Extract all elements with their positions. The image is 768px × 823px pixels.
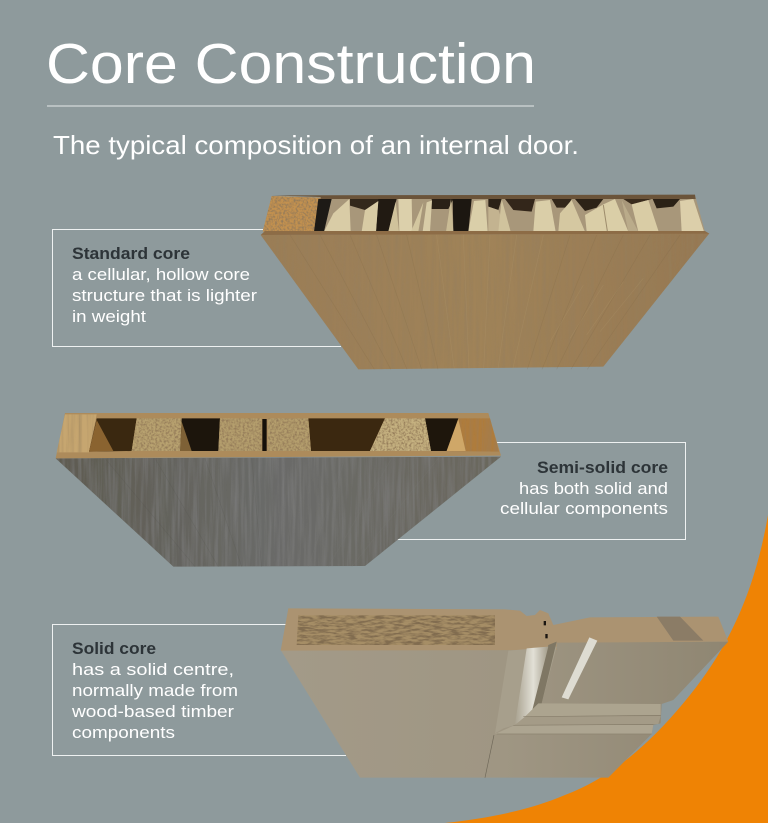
callout frame: standard core (52, 230, 341, 346)
title: Core Construction (46, 32, 536, 96)
right timber stile (447, 418, 499, 452)
heading: semi-solid core: Semi-solid core (537, 459, 668, 477)
top veneer strip (272, 195, 696, 199)
door face: grey veneer (56, 457, 501, 567)
door: semi-solid core (56, 413, 501, 567)
large moulding (515, 647, 548, 724)
chipboard blocks (132, 418, 466, 451)
subtitle: The typical composition of an internal door. (53, 130, 579, 160)
callout frame: solid core (52, 624, 346, 756)
body line: structure that is lighter (72, 287, 258, 305)
body line: a cellular, hollow core (72, 266, 250, 284)
honeycomb cavity (313, 198, 705, 232)
frame shading (657, 617, 703, 641)
solid edge block (263, 196, 321, 232)
section slot lower (545, 634, 548, 638)
body line: has a solid centre, (72, 661, 234, 679)
door: standard core (261, 195, 709, 369)
text: standard core (72, 245, 258, 326)
door: solid core (281, 608, 728, 778)
door face: primed panel (281, 642, 728, 778)
text: solid core (71, 640, 238, 742)
section profile (281, 608, 728, 651)
callout frame: semi-solid core (397, 442, 686, 540)
heading: solid core: Solid core (72, 640, 156, 658)
lower panel rails (495, 703, 661, 734)
moulding surround (495, 647, 557, 733)
body line: in weight (72, 308, 146, 326)
small moulding (562, 637, 597, 699)
veneer fan grain (290, 235, 680, 369)
door face: oak veneer (261, 233, 709, 369)
moulding shadow (529, 642, 557, 721)
heading: standard core: Standard core (72, 245, 190, 263)
chipboard centre (297, 615, 495, 645)
honeycomb cells (314, 199, 704, 232)
title divider (47, 106, 534, 107)
orange corner curve (445, 515, 768, 823)
body line: normally made from (72, 682, 238, 700)
bottom veneer strip (261, 231, 709, 235)
left timber stile (57, 414, 97, 452)
hollow cells (89, 418, 458, 452)
panel joint (485, 735, 494, 778)
section frame (56, 413, 501, 458)
body line: wood-based timber (71, 703, 235, 721)
veneer fan grain (105, 458, 438, 567)
body line: components (72, 724, 175, 742)
body line: has both solid and (519, 480, 668, 498)
section slot upper (544, 621, 546, 625)
text: semi-solid core (500, 459, 668, 518)
body line: cellular components (500, 500, 668, 518)
